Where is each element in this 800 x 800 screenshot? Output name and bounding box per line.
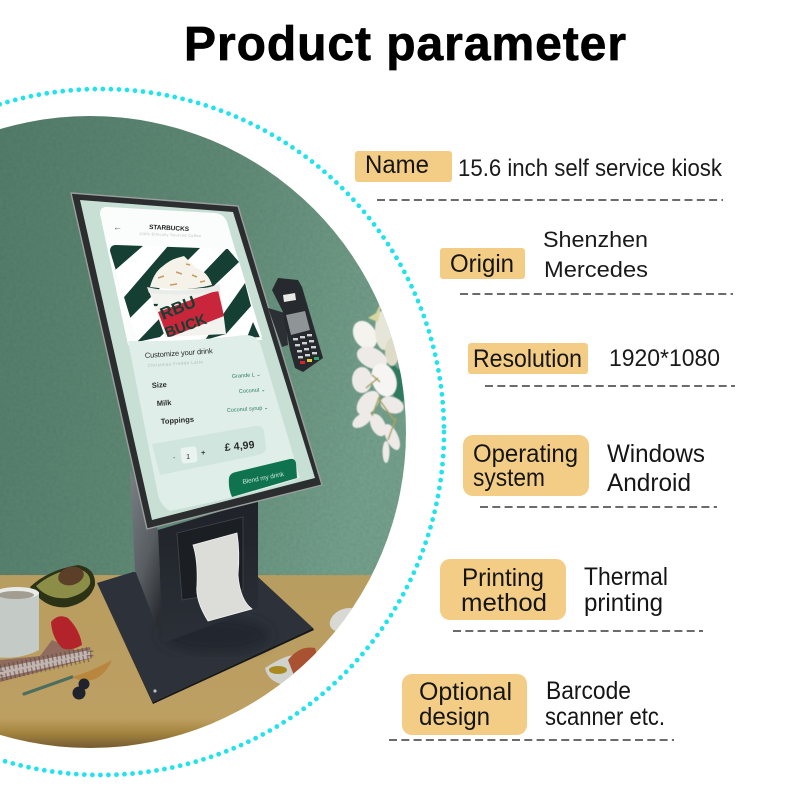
row: printing method bbox=[440, 559, 703, 631]
product photo in circle bbox=[0, 100, 420, 750]
optional design label: Optional bbox=[419, 678, 512, 706]
wall texture bbox=[20, 248, 398, 576]
blend button: Blend my drink bbox=[242, 471, 285, 486]
drink cup bbox=[147, 256, 226, 337]
printing method label bbox=[461, 564, 547, 617]
optional design label bbox=[419, 678, 512, 731]
back arrow: ← bbox=[113, 222, 122, 232]
optional design label: design bbox=[419, 703, 490, 731]
screen glass bbox=[80, 200, 315, 520]
origin value bbox=[543, 227, 648, 282]
operating system value bbox=[607, 440, 705, 497]
price: £ 4,99 bbox=[224, 439, 255, 454]
interface header bbox=[114, 224, 201, 238]
receipt window bbox=[283, 293, 296, 302]
optional design badge bbox=[402, 674, 527, 735]
keypad bbox=[293, 334, 319, 364]
resolution value: 1920*1080 bbox=[609, 345, 720, 372]
optional design value bbox=[545, 677, 665, 731]
avocado bbox=[30, 564, 95, 607]
origin value: Shenzhen bbox=[543, 227, 648, 252]
brand name: STARBUCKS bbox=[149, 224, 190, 233]
origin badge bbox=[440, 248, 525, 279]
flowers bbox=[351, 305, 404, 464]
origin value: Mercedes bbox=[544, 257, 648, 282]
customise text: Coconut ⌄ bbox=[239, 387, 266, 395]
kiosk screen bbox=[71, 193, 322, 529]
name label: Name bbox=[365, 151, 429, 179]
printing method label: method bbox=[461, 589, 547, 617]
spoon bbox=[24, 660, 112, 694]
printing method badge bbox=[440, 559, 566, 620]
operating system label: Operating bbox=[473, 440, 578, 468]
white dish bbox=[326, 603, 364, 637]
operating system badge bbox=[463, 435, 589, 496]
name value: 15.6 inch self service kiosk bbox=[458, 155, 723, 182]
kiosk base plate bbox=[97, 572, 313, 702]
option values: Grande L ⌄ bbox=[232, 372, 261, 380]
quantity stepper: + bbox=[201, 448, 206, 457]
operating system label bbox=[473, 440, 578, 492]
screen bezel bbox=[71, 193, 322, 529]
notebook bbox=[0, 640, 92, 682]
quantity stepper: 1 bbox=[186, 452, 190, 461]
customise panel bbox=[128, 335, 300, 511]
resolution label: Resolution bbox=[473, 345, 582, 373]
customise text: Milk bbox=[157, 398, 173, 408]
blueberries bbox=[72, 678, 90, 700]
row: operating system bbox=[463, 435, 717, 507]
stand left face bbox=[130, 470, 160, 613]
quantity and price bar bbox=[152, 426, 266, 475]
resolution badge bbox=[468, 343, 588, 374]
table top bbox=[0, 575, 372, 748]
base screw bbox=[153, 689, 157, 693]
printing method value: printing bbox=[584, 589, 663, 617]
coffee mug bbox=[0, 587, 39, 658]
operating system value: Android bbox=[607, 469, 691, 497]
quantity stepper bbox=[173, 446, 206, 464]
dotted circle outline bbox=[0, 89, 444, 775]
row: name bbox=[355, 151, 723, 200]
printer panel bbox=[177, 517, 243, 600]
base shadow bbox=[160, 617, 270, 653]
optional design value: Barcode bbox=[546, 677, 631, 705]
customise text bbox=[145, 346, 269, 426]
payment terminal bbox=[268, 278, 323, 372]
row: origin bbox=[440, 227, 733, 294]
operating system value: Windows bbox=[607, 440, 705, 468]
customise text: Toppings bbox=[161, 415, 194, 426]
name badge bbox=[355, 151, 452, 182]
row: optional design bbox=[389, 674, 674, 740]
strawberry bbox=[51, 616, 82, 649]
panel subheading: Christmas Freddo Latte bbox=[148, 359, 204, 368]
brand subtitle: 100% Ethically Sourced Coffee bbox=[139, 232, 201, 238]
quantity stepper: - bbox=[173, 455, 176, 462]
origin label: Origin bbox=[450, 250, 514, 278]
title: Product parameter bbox=[184, 18, 626, 71]
row: resolution bbox=[468, 343, 735, 386]
white interface top bbox=[100, 207, 262, 345]
stand front face bbox=[158, 500, 258, 643]
option labels: Size bbox=[152, 380, 167, 390]
customise text: Coconut syrup ⌄ bbox=[227, 405, 269, 414]
terminal bracket bbox=[268, 308, 288, 347]
terminal display bbox=[286, 311, 310, 335]
printing method value bbox=[584, 563, 668, 617]
printing method value: Thermal bbox=[584, 563, 668, 591]
operating system label: system bbox=[473, 464, 545, 492]
striped banner bbox=[110, 245, 262, 342]
drink cup: RBU bbox=[157, 292, 199, 324]
terminal body bbox=[272, 278, 323, 372]
panel heading: Customize your drink bbox=[145, 346, 213, 360]
optional design value: scanner etc. bbox=[545, 703, 665, 731]
small bowl bbox=[265, 648, 320, 685]
wall background bbox=[0, 100, 420, 580]
drink cup: BUCK bbox=[163, 311, 209, 342]
blend button bbox=[229, 459, 297, 497]
printing method label: Printing bbox=[462, 564, 544, 592]
receipt paper bbox=[193, 533, 252, 621]
drink cup: A bbox=[140, 298, 162, 316]
